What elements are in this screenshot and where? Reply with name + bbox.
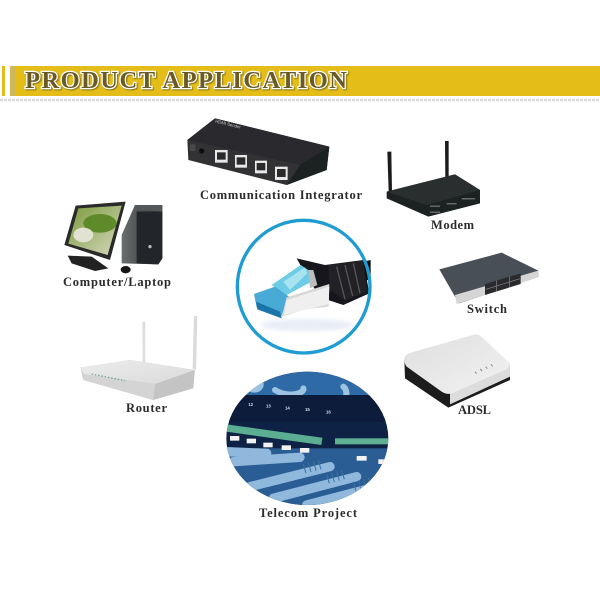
image: telecom project [220,370,395,507]
image: telecom project: 14 [285,405,290,410]
label: computer/laptop: Computer/Laptop [63,275,171,289]
plug cable boot [297,258,369,305]
image: telecom project: 15 [305,407,310,412]
banner title: PRODUCT APPLICATION [25,67,347,94]
device: computer [64,202,162,273]
label: switch: Switch [467,302,507,316]
image: telecom project: 16 [326,409,331,414]
device: adsl [404,334,510,408]
center image: ethernet plug [237,220,371,353]
label: modem: Modem [431,218,475,232]
device: switch [439,253,538,304]
label: telecom project: Telecom Project [259,506,358,520]
circle ring [237,220,370,353]
device: modem [387,141,480,217]
device: communication integrator [187,118,329,185]
label: adsl: ADSL [458,403,491,417]
header banner [0,66,600,100]
device: communication integrator: HDMI Sender [215,118,242,130]
device: router [81,316,197,400]
label: communication integrator: Communication Integrator [200,188,362,202]
image: telecom project: 12 [248,402,254,407]
image: telecom project: 13 [266,403,271,408]
label: router: Router [126,401,167,415]
